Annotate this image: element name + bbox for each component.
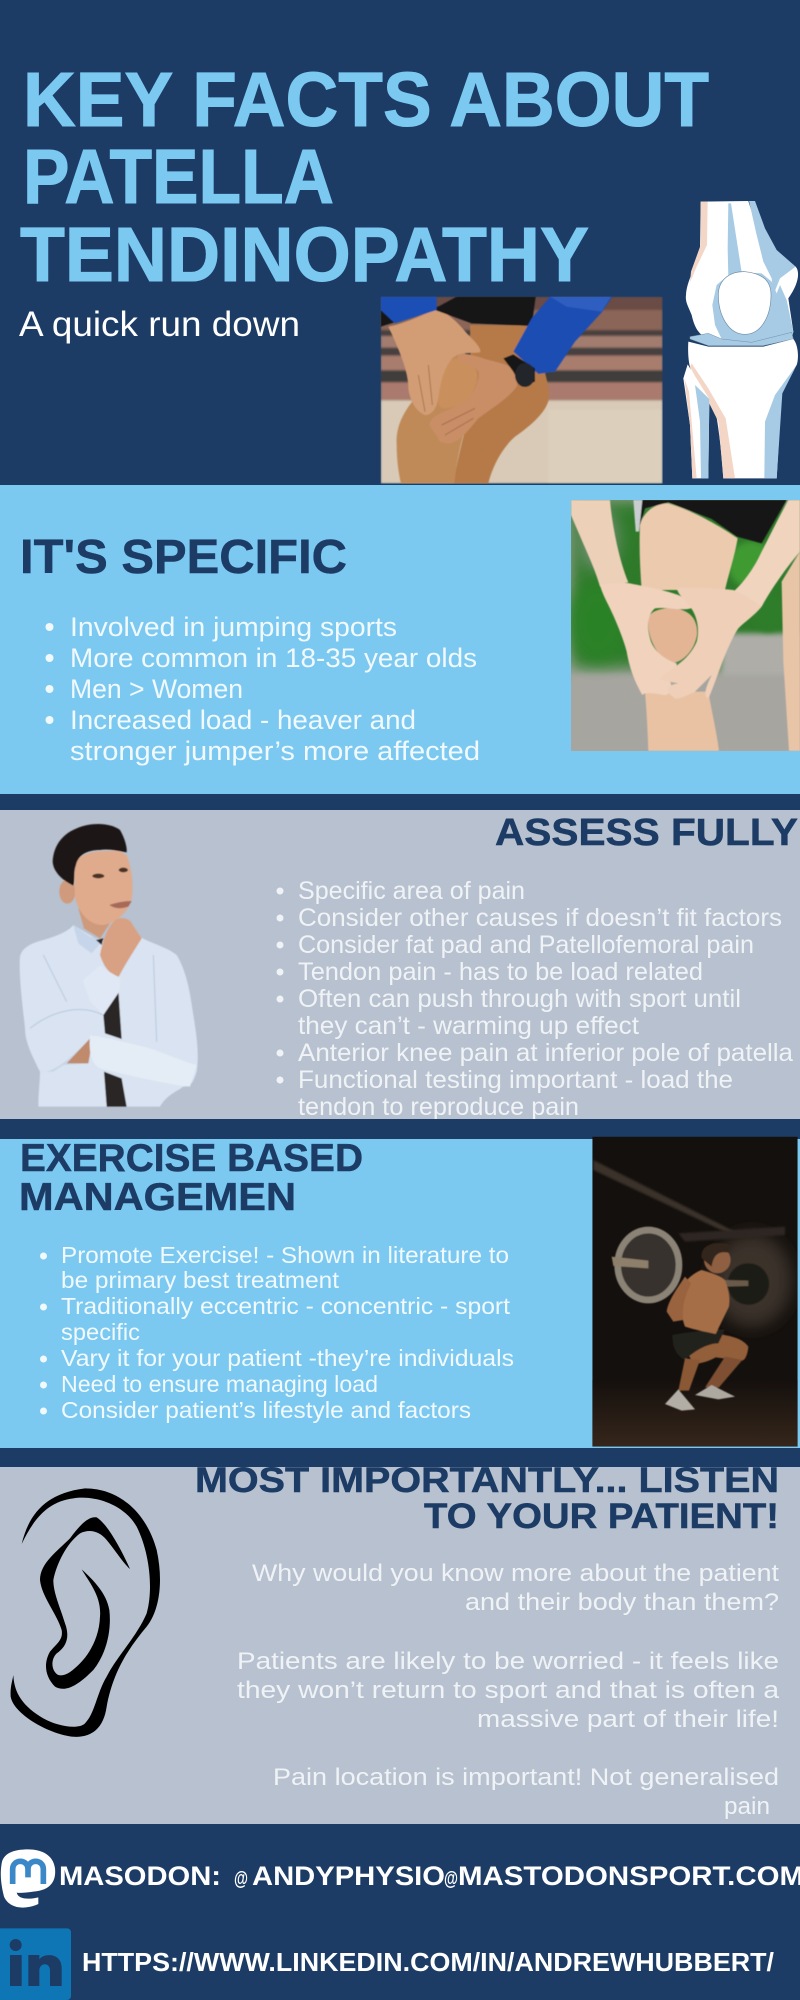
text block: patient advice: and their body than them?: [465, 1589, 779, 1616]
text: mastodon handle: MASODON:: [59, 1861, 221, 1891]
title: PATELLA: [23, 134, 334, 220]
heading: listen to your patient: TO YOUR PATIENT!: [424, 1497, 779, 1536]
text: mastodon handle: @: [444, 1868, 458, 1890]
bullet list: assess fully: Anterior knee pain at inferior pole of patella: [298, 1039, 793, 1067]
bullet list: exercise: Need to ensure managing load: [61, 1371, 378, 1397]
photo: runner holding knee: [381, 297, 663, 484]
text: mastodon handle: MASTODONSPORT.COM: [458, 1861, 800, 1891]
text block: patient advice: Pain location is important! Not generalised: [273, 1764, 779, 1791]
text block: patient advice: they won’t return to sport and that is often a: [237, 1677, 779, 1704]
bullet list: exercise: specific: [61, 1319, 140, 1345]
title: [20, 57, 709, 298]
heading: listen to your patient: [195, 1461, 779, 1536]
bullet list: it's specific: [46, 612, 480, 766]
heading: it's specific: IT'S SPECIFIC: [20, 531, 347, 584]
text block: patient advice: pain: [724, 1793, 770, 1820]
text block: patient advice: massive part of their life!: [477, 1706, 779, 1733]
panel: contact footer: [0, 1849, 800, 2000]
panel: exercise based management: [0, 1137, 800, 1448]
bullet list: assess fully: Tendon pain - has to be load related: [298, 958, 703, 986]
text: mastodon handle: @: [234, 1868, 248, 1890]
bullet list: it's specific: stronger jumper’s more affected: [70, 736, 480, 766]
bullet list: assess fully: Specific area of pain: [298, 877, 525, 905]
panel: header: [19, 57, 798, 484]
text block: patient advice: Patients are likely to be worried - it feels like: [237, 1648, 779, 1675]
illustration: knee joint: [683, 201, 798, 478]
bullet list: exercise: Vary it for your patient -they’re individuals: [61, 1345, 514, 1371]
bullet list: assess fully: tendon to reproduce pain: [298, 1093, 579, 1121]
bullet list: assess fully: Consider other causes if doesn’t fit factors: [298, 904, 782, 932]
bullet list: it's specific: Involved in jumping sports: [70, 612, 397, 642]
title: TENDINOPATHY: [20, 212, 589, 298]
heading: exercise based management: EXERCISE BASED: [20, 1137, 363, 1180]
bullet list: exercise: [40, 1242, 514, 1423]
panel: it's specific: [0, 485, 800, 794]
bullet list: exercise: Promote Exercise! - Shown in literature to: [61, 1242, 509, 1268]
panel: assess fully: [0, 810, 800, 1121]
photo: barbell squat: [592, 1137, 798, 1447]
bullet list: assess fully: Often can push through with sport until: [298, 985, 741, 1013]
text block: patient advice: Why would you know more about the patient: [252, 1560, 779, 1587]
icon: mastodon: [1, 1849, 55, 1908]
bullet list: it's specific: More common in 18-35 year olds: [70, 643, 477, 673]
bullet list: exercise: be primary best treatment: [61, 1267, 339, 1293]
text block: patient advice: [237, 1560, 779, 1820]
bullet list: exercise: Traditionally eccentric - concentric - sport: [61, 1293, 510, 1319]
bullet list: exercise: Consider patient’s lifestyle and factors: [61, 1397, 471, 1423]
icon: ear: [11, 1488, 160, 1737]
subtitle: A quick run down: [19, 305, 300, 344]
heading: exercise based management: MANAGEMEN: [19, 1176, 296, 1219]
heading: exercise based management: [19, 1137, 363, 1219]
title: KEY FACTS ABOUT: [23, 57, 709, 143]
bullet list: it's specific: Increased load - heaver and: [70, 705, 416, 735]
bullet list: it's specific: Men > Women: [70, 674, 243, 704]
bullet list: assess fully: Consider fat pad and Patellofemoral pain: [298, 931, 754, 959]
text: linkedin url: HTTPS://WWW.LINKEDIN.COM/IN/ANDREWHUBBERT/: [82, 1947, 774, 1977]
heading: assess fully: ASSESS FULLY: [495, 812, 798, 854]
icon: linkedin: [0, 1928, 71, 2000]
photo: hands around knee: [568, 500, 800, 751]
text: mastodon handle: ANDYPHYSIO: [252, 1861, 445, 1891]
bullet list: assess fully: they can’t - warming up effect: [298, 1012, 639, 1040]
photo: thoughtful man: [20, 824, 198, 1107]
bullet list: assess fully: [276, 877, 793, 1121]
heading: listen to your patient: MOST IMPORTANTLY... LISTEN: [195, 1461, 779, 1500]
bullet list: assess fully: Functional testing important - load the: [298, 1066, 733, 1094]
panel: listen to your patient: [0, 1461, 800, 1824]
